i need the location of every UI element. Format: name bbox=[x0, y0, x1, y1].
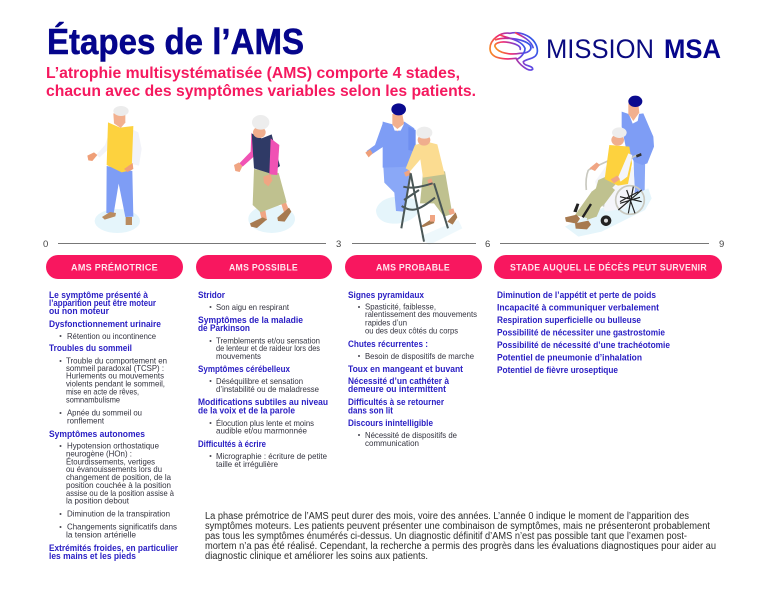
section: voice and speech changes: Modifications subtiles au niveau bbox=[198, 397, 328, 407]
panel: final stage symptoms: Respiration superficielle ou bulleuse bbox=[497, 315, 641, 325]
panel: final stage symptoms: Incapacité à communiquer verbalement bbox=[497, 302, 659, 312]
footer note bbox=[205, 511, 716, 562]
section: stridor: Son aigu en respirant bbox=[216, 302, 290, 312]
panel: final stage symptoms: Potentiel de fièvre uroseptique bbox=[497, 365, 618, 375]
timeline bbox=[43, 239, 724, 250]
heading: cold extremities bbox=[49, 543, 179, 561]
section: sleep disorders: ronflement bbox=[67, 416, 105, 426]
timeline: 9 bbox=[719, 239, 724, 250]
section: parkinson symptoms: de lenteur et de raideur lors des bbox=[216, 343, 320, 353]
footer note: diagnostic clinique et améliorer les soins aux patients. bbox=[205, 551, 428, 562]
footer note: symptômes moteurs. Les patients peuvent présenter une combinaison de symptômes, mais ne présenteront probablement bbox=[205, 521, 710, 532]
illustration: man standing, premotor stage bbox=[87, 106, 142, 233]
timeline: 6 bbox=[485, 239, 490, 250]
section: autonomic symptoms: la tension artérielle bbox=[66, 530, 136, 540]
section: parkinson symptoms bbox=[198, 315, 320, 361]
stage pill: AMS probable: AMS PROBABLE bbox=[376, 262, 450, 272]
heading: catheter: Nécessité d’un cathéter à bbox=[348, 376, 449, 386]
section: autonomic symptoms: ou évanouissements lors du bbox=[66, 464, 162, 474]
section: sleep disorders: sommeil paradoxal (TCSP) : bbox=[66, 363, 164, 373]
section: pyramidal signs: Signes pyramidaux bbox=[348, 290, 424, 300]
heading: first symptom bbox=[49, 290, 157, 316]
section: stridor bbox=[198, 290, 290, 312]
illustration: nurse pushing patient in wheelchair, final stage bbox=[565, 96, 654, 237]
section: stridor: Stridor bbox=[198, 290, 226, 300]
section: voice and speech changes bbox=[198, 397, 328, 436]
section: cerebellar symptoms: Symptômes cérébelleux bbox=[198, 364, 290, 374]
stage pill: AMS possible bbox=[196, 255, 332, 279]
section: sleep disorders: Hurlements ou mouvements bbox=[66, 370, 164, 380]
section: cerebellar symptoms: d’instabilité ou de maladresse bbox=[216, 384, 319, 394]
panel: final stage symptoms: Diminution de l’appétit et perte de poids bbox=[497, 290, 656, 300]
section: autonomic symptoms: Diminution de la transpiration bbox=[67, 508, 170, 518]
section: unintelligible speech: Discours inintelligible bbox=[348, 418, 433, 428]
section: writing difficulties: Micrographie : écriture de petite bbox=[216, 451, 327, 461]
illustration: woman walking, possible stage bbox=[234, 115, 295, 233]
stage pill: final stage: STADE AUQUEL LE DÉCÈS PEUT SURVENIR bbox=[510, 262, 707, 272]
section: writing difficulties bbox=[198, 439, 327, 469]
section: urinary dysfunction: Dysfonctionnement urinaire bbox=[49, 319, 161, 329]
section: autonomic symptoms: Symptômes autonomes bbox=[49, 429, 145, 439]
section: parkinson symptoms: Symptômes de la maladie bbox=[198, 315, 303, 325]
section: cerebellar symptoms bbox=[198, 364, 319, 394]
panel: final stage symptoms: Possibilité de nécessité d’une trachéotomie bbox=[497, 340, 670, 350]
section: writing difficulties: Difficultés à écrire bbox=[198, 439, 266, 449]
stage pill: AMS possible: AMS POSSIBLE bbox=[229, 262, 298, 272]
section: sleep disorders: Trouble du comportement en bbox=[66, 356, 167, 366]
section: sleep disorders: Apnée du sommeil ou bbox=[67, 408, 142, 418]
logo: Mission MSA: MSA bbox=[664, 34, 721, 64]
section: autonomic symptoms: position couchée à la position bbox=[66, 480, 171, 490]
section: autonomic symptoms: changement de position, de la bbox=[66, 472, 171, 482]
heading: turning in bed: Difficultés à se retourner bbox=[348, 397, 445, 407]
stage pill: final stage bbox=[494, 255, 722, 279]
section: unintelligible speech bbox=[348, 418, 457, 448]
panel: final stage symptoms: Possibilité de nécessiter une gastrostomie bbox=[497, 328, 665, 338]
section: urinary dysfunction bbox=[49, 319, 161, 341]
stage pill: AMS probable bbox=[345, 255, 482, 279]
heading: catheter: demeure ou intermittent bbox=[348, 384, 446, 394]
panel: possible stage symptoms bbox=[198, 290, 328, 469]
subtitle: chacun avec des symptômes variables selon les patients. bbox=[46, 83, 476, 100]
section: unintelligible speech: communication bbox=[365, 438, 419, 448]
title: Étapes de l’AMS bbox=[47, 21, 304, 62]
panel: premotor symptoms bbox=[49, 290, 179, 561]
timeline: 0 bbox=[43, 239, 48, 250]
section: sleep disorders: mise en acte de rêves, bbox=[66, 386, 139, 396]
section: voice and speech changes: Élocution plus lente et moins bbox=[216, 418, 314, 428]
section: autonomic symptoms: Hypotension orthostatique bbox=[67, 440, 159, 450]
logo: Mission MSA bbox=[490, 33, 721, 70]
section: autonomic symptoms: Étourdissements, vertiges bbox=[66, 456, 155, 466]
section: parkinson symptoms: de Parkinson bbox=[198, 323, 250, 333]
section: voice and speech changes: audible et/ou marmonnée bbox=[216, 426, 307, 436]
section: autonomic symptoms: neurogène (HOn) : bbox=[66, 448, 132, 458]
section: autonomic symptoms bbox=[49, 429, 177, 540]
section: sleep disorders bbox=[49, 343, 167, 426]
section: pyramidal signs: rapides d’un bbox=[365, 318, 407, 328]
panel: final stage symptoms: Potentiel de pneumonie d’inhalation bbox=[497, 352, 642, 362]
section: sleep disorders: Troubles du sommeil bbox=[49, 343, 132, 353]
section: sleep disorders: somnambulisme bbox=[66, 394, 120, 404]
stage pill: AMS prémotrice: AMS PRÉMOTRICE bbox=[71, 262, 158, 272]
panel: final stage symptoms bbox=[497, 290, 670, 375]
heading: first symptom: l’apparition peut être moteur bbox=[49, 298, 157, 308]
heading: cold extremities: Extrémités froides, en particulier bbox=[49, 543, 179, 553]
heading: turning in bed: dans son lit bbox=[348, 406, 393, 416]
section: recurrent falls: Besoin de dispositifs de marche bbox=[365, 351, 474, 361]
timeline: 3 bbox=[336, 239, 341, 250]
footer note: mortem n’a pas été réalisé. Cependant, la recherche a permis des progrès dans les évaluations diagnostiques pour aider au bbox=[205, 541, 716, 552]
stage pill: AMS prémotrice bbox=[46, 255, 183, 279]
heading: first symptom: Le symptôme présenté à bbox=[49, 290, 148, 300]
section: autonomic symptoms: la position debout bbox=[66, 496, 130, 506]
footer note: pas tous les symptômes énumérés ci-dessus. Un diagnostic définitif d’AMS n’est pas possible tant que l’examen post- bbox=[205, 531, 687, 542]
heading: first symptom: ou non moteur bbox=[49, 306, 110, 316]
heading: cold extremities: les mains et les pieds bbox=[49, 551, 136, 561]
section: pyramidal signs: ralentissement des mouvements bbox=[365, 309, 477, 319]
subtitle: L’atrophie multisystématisée (AMS) comporte 4 stades, bbox=[46, 65, 460, 82]
section: parkinson symptoms: Tremblements et/ou sensation bbox=[216, 336, 320, 346]
section: autonomic symptoms: Changements significatifs dans bbox=[67, 522, 177, 532]
section: voice and speech changes: de la voix et de la parole bbox=[198, 406, 295, 416]
subtitle bbox=[46, 65, 476, 100]
panel: probable stage symptoms bbox=[348, 290, 477, 448]
section: autonomic symptoms: assise ou de la position assise à bbox=[66, 488, 174, 498]
heading: cough when eating: Toux en mangeant et buvant bbox=[348, 364, 463, 374]
section: cerebellar symptoms: Déséquilibre et sensation bbox=[216, 376, 303, 386]
logo: Mission MSA: MISSION bbox=[546, 34, 654, 64]
section: pyramidal signs: Spasticité, faiblesse, bbox=[365, 302, 436, 312]
heading: turning in bed bbox=[348, 397, 445, 416]
heading: catheter bbox=[348, 376, 449, 394]
section: recurrent falls: Chutes récurrentes : bbox=[348, 339, 428, 349]
section: sleep disorders: violents pendant le sommeil, bbox=[66, 378, 165, 388]
section: urinary dysfunction: Rétention ou incontinence bbox=[67, 331, 156, 341]
section: writing difficulties: taille et irrégulière bbox=[216, 459, 278, 469]
section: unintelligible speech: Nécessité de dispositifs de bbox=[365, 430, 457, 440]
section: pyramidal signs bbox=[348, 290, 477, 336]
section: pyramidal signs: ou des deux côtés du corps bbox=[365, 326, 458, 336]
section: recurrent falls bbox=[348, 339, 474, 361]
footer note: La phase prémotrice de l’AMS peut durer des mois, voire des années. L’année 0 indique le moment de l’apparition des bbox=[205, 511, 689, 522]
section: parkinson symptoms: mouvements bbox=[216, 351, 261, 361]
illustration: nurse helping patient with walker, probable stage bbox=[365, 103, 462, 245]
